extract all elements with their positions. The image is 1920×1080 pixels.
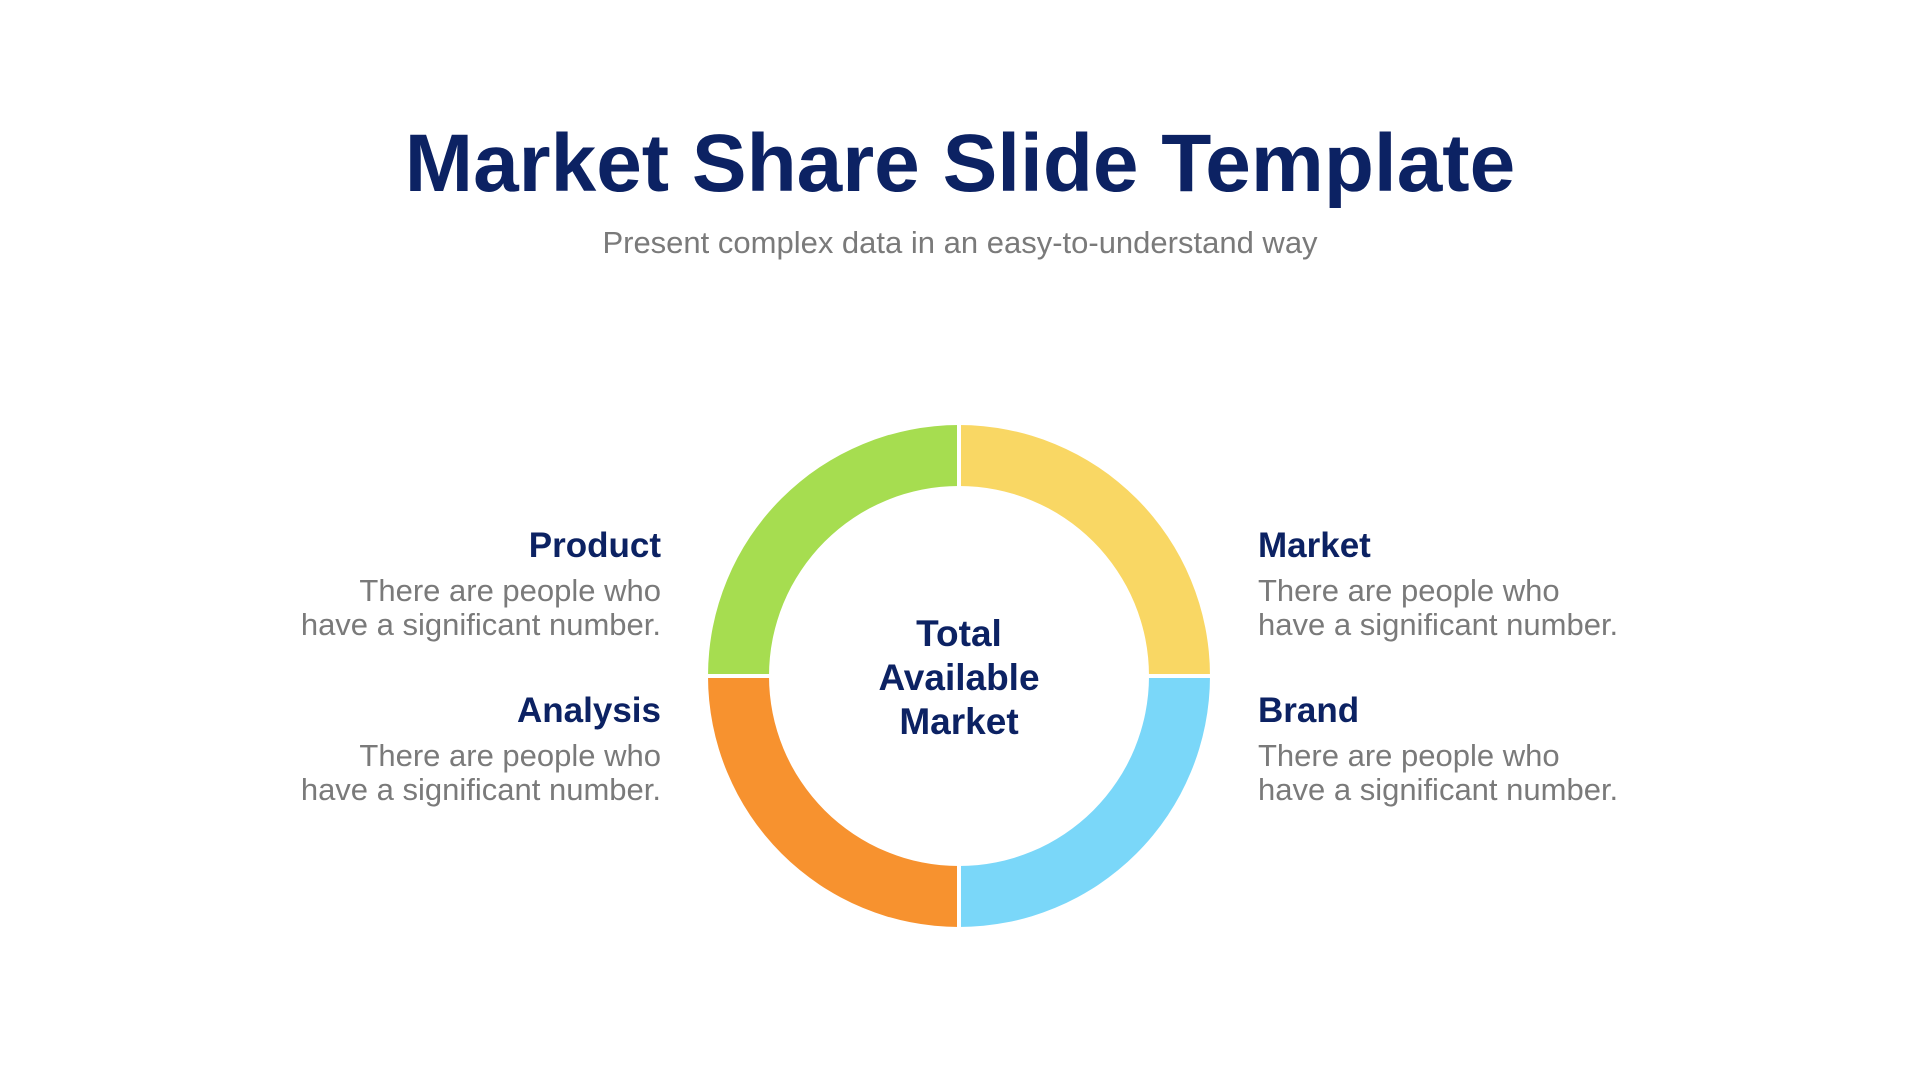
label: market: Market [1258,526,1371,565]
label: brand [1258,691,1618,807]
segment: product (green) [708,425,959,676]
label: market: There are people who [1258,573,1560,608]
label: product: There are people who [359,573,661,608]
label: brand: have a significant number. [1258,772,1618,807]
segment: brand (blue) [959,676,1210,927]
center label [878,613,1040,742]
center label: Market [899,701,1019,742]
segment: market (yellow) [959,425,1210,676]
label: product: have a significant number. [301,607,661,642]
label: analysis: There are people who [359,738,661,773]
label: product: Product [529,526,661,565]
label: market [1258,526,1618,642]
center label: Total [916,613,1002,654]
center label: Available [878,657,1040,698]
label: brand: There are people who [1258,738,1560,773]
label: analysis: have a significant number. [301,772,661,807]
label: brand: Brand [1258,691,1359,730]
segment: analysis (orange) [708,676,959,927]
subtitle: Present complex data in an easy-to-understand way [602,225,1318,260]
label: product [301,526,661,642]
title: Market Share Slide Template [405,118,1515,209]
label: market: have a significant number. [1258,607,1618,642]
label: analysis [301,691,661,807]
label: analysis: Analysis [517,691,661,730]
